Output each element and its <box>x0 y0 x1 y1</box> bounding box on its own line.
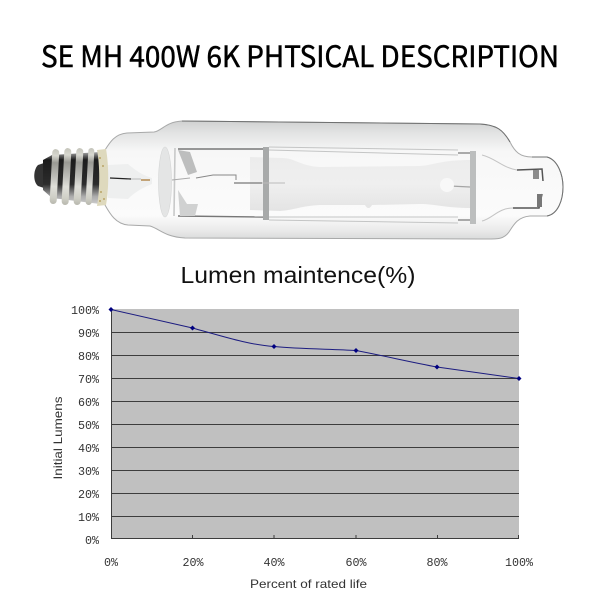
end spring clip <box>513 169 543 208</box>
screw base <box>43 152 100 204</box>
support straps <box>263 147 269 220</box>
y axis labels: 40% <box>78 442 100 456</box>
y axis labels: 50% <box>78 419 100 433</box>
y axis title: Initial Lumens <box>51 396 65 480</box>
y axis labels: 30% <box>78 465 100 479</box>
top edge highlight <box>182 121 563 216</box>
y axis labels: 60% <box>78 396 100 410</box>
base tip <box>34 163 44 188</box>
x axis labels: 80% <box>426 556 449 570</box>
y axis labels <box>71 304 100 548</box>
glass envelope <box>105 121 563 239</box>
y axis labels: 90% <box>78 327 100 341</box>
x axis labels: 100% <box>505 556 534 570</box>
data line <box>111 310 519 378</box>
x axis labels <box>104 556 534 570</box>
plot area <box>111 309 519 539</box>
y axis labels: 80% <box>78 350 100 364</box>
y axis labels: 70% <box>78 373 100 387</box>
x axis labels: 0% <box>104 556 119 570</box>
y axis labels: 100% <box>71 304 100 318</box>
data points <box>108 307 522 381</box>
getter discs <box>158 147 172 217</box>
inner support rods <box>174 147 470 223</box>
x axis labels: 20% <box>182 556 205 570</box>
lead wires <box>196 175 236 180</box>
icon: metal halide bulb <box>34 121 563 239</box>
chart heading: Lumen maintence(%) <box>180 262 416 288</box>
arc tube <box>250 157 472 211</box>
x axis labels: 60% <box>345 556 368 570</box>
y axis labels: 10% <box>78 511 100 525</box>
base ring <box>97 149 108 206</box>
title: SE MH 400W 6K PHTSICAL DESCRIPTION <box>41 34 559 76</box>
neck <box>108 164 152 199</box>
line chart <box>51 304 534 591</box>
y axis labels: 0% <box>85 534 100 548</box>
x axis labels: 40% <box>263 556 286 570</box>
y axis labels: 20% <box>78 488 100 502</box>
x axis title: Percent of rated life <box>250 577 367 591</box>
